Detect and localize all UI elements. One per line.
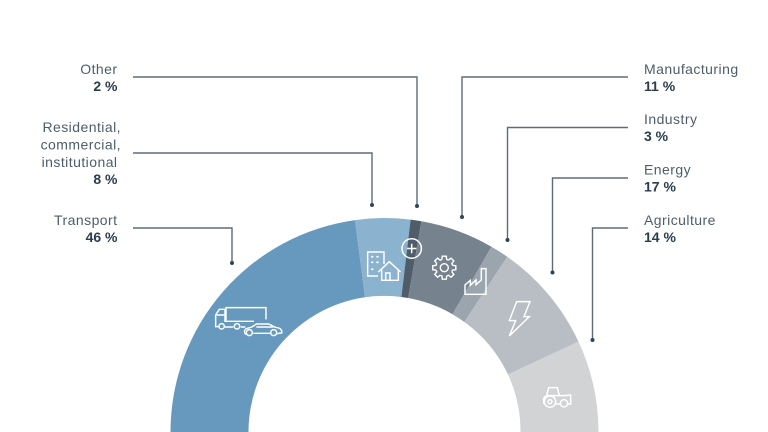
label: residential, commercial, institutional: institutional — [42, 154, 118, 170]
label: transport — [54, 212, 118, 245]
label: other: 2 % — [93, 78, 118, 94]
segment: other 2% — [401, 220, 421, 298]
label: transport: Transport — [54, 212, 118, 228]
label: industry: 3 % — [644, 128, 669, 144]
icon: factory — [465, 269, 486, 294]
label: manufacturing: Manufacturing — [644, 61, 739, 77]
segment: energy 17% — [464, 257, 578, 374]
label: residential, commercial, institutional: commercial, — [41, 136, 121, 152]
leader line: other — [133, 77, 419, 208]
label: residential, commercial, institutional: 8 % — [93, 171, 118, 187]
label: agriculture: 14 % — [644, 229, 676, 245]
semicircular donut chart — [170, 218, 598, 432]
label: energy: Energy — [644, 162, 691, 178]
leader line: manufacturing — [460, 77, 628, 219]
icon: tractor — [544, 388, 571, 407]
leader line: transport — [133, 228, 234, 265]
label: other — [80, 61, 118, 94]
icon: lightning bolt — [509, 302, 530, 336]
segment: agriculture 14% — [508, 342, 598, 432]
segment: industry 3% — [452, 247, 507, 322]
segment: manufacturing 11% — [408, 221, 492, 314]
icon: plus in circle — [402, 239, 421, 258]
segment: transport 46% — [170, 220, 365, 432]
icon: building and house — [368, 252, 401, 280]
label: industry — [644, 111, 697, 144]
leader line: agriculture — [590, 228, 628, 342]
label: agriculture: Agriculture — [644, 212, 716, 228]
icon: gear — [433, 256, 456, 279]
label: energy: 17 % — [644, 178, 676, 194]
leader line: energy — [550, 178, 628, 274]
leader line: industry — [506, 128, 628, 242]
label: residential, commercial, institutional: Residential, — [42, 119, 121, 135]
label: transport: 46 % — [86, 229, 118, 245]
label: manufacturing: 11 % — [644, 78, 676, 94]
label: residential, commercial, institutional — [41, 119, 121, 187]
label: energy — [644, 162, 691, 194]
label: manufacturing — [644, 61, 739, 94]
label: other: Other — [80, 61, 118, 77]
segment: residential, commercial, institutional 8% — [355, 218, 411, 297]
label: agriculture — [644, 212, 716, 245]
leader line: residential — [133, 153, 374, 207]
icon: truck and car — [216, 308, 282, 336]
label: industry: Industry — [644, 111, 697, 127]
